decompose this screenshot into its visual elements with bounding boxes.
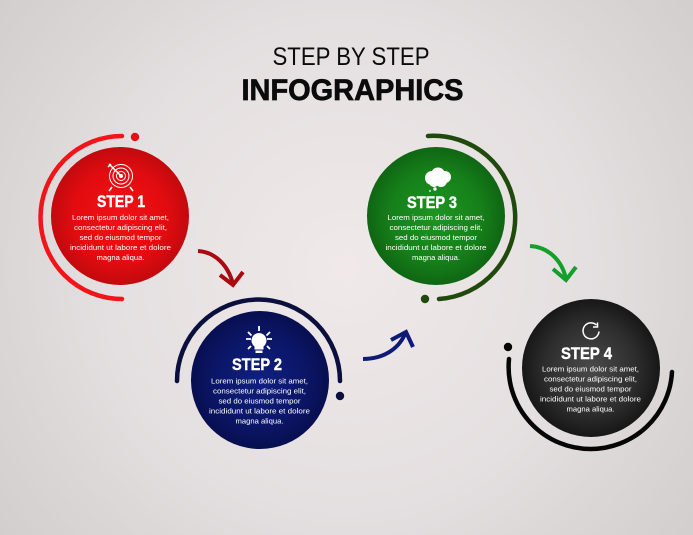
step 4 heading: STEP 4: [561, 345, 613, 363]
step 1 circle: [51, 147, 189, 285]
step 2 text: incididunt ut labore et dolore: [209, 406, 310, 416]
step 1 arc: [40, 136, 122, 299]
step 2 dot: [336, 392, 344, 400]
arrow: red: [198, 251, 243, 285]
step 3 text: [386, 213, 486, 262]
title: [242, 43, 464, 107]
step 2 text: consectetur adipiscing elit,: [213, 386, 306, 396]
icon: cloud: [425, 168, 451, 192]
step 2 circle: [191, 311, 329, 449]
panel: step 4: [504, 299, 672, 449]
step 4 text: [540, 364, 641, 414]
panel: step 3: [367, 136, 515, 303]
panel: step 1: [40, 133, 189, 299]
step 1 text: magna aliqua.: [96, 253, 144, 262]
step 4 text: consectetur adipiscing elit,: [544, 374, 637, 384]
step 4 text: sed do eiusmod tempor: [550, 384, 632, 394]
step 3 heading: STEP 3: [407, 194, 457, 212]
arrow: green: [530, 246, 576, 280]
step 1 heading: STEP 1: [97, 193, 145, 211]
step 3 dot: [421, 295, 429, 303]
step 3 text: consectetur adipiscing elit,: [390, 223, 482, 232]
icon: target: [108, 164, 133, 191]
step 3 text: Lorem ipsum dolor sit amet,: [388, 213, 484, 222]
title: INFOGRAPHICS: [242, 74, 464, 107]
step 1 dot: [131, 133, 139, 141]
step 3 text: sed do eiusmod tempor: [395, 233, 477, 242]
step 3 arc: [428, 136, 515, 299]
step 4 dot: [504, 343, 512, 351]
title: STEP BY STEP: [272, 43, 430, 71]
step 4 arc: [509, 359, 672, 449]
step 1 text: Lorem ipsum dolor sit amet,: [72, 213, 169, 222]
step 2 text: sed do eiusmod tempor: [218, 396, 301, 406]
step 1 text: incididunt ut labore et dolore: [70, 243, 171, 252]
step 4 text: incididunt ut labore et dolore: [540, 394, 641, 404]
step 1 text: consectetur adipiscing elit,: [74, 223, 167, 232]
step 2 text: Lorem ipsum dolor sit amet,: [211, 376, 308, 386]
icon: refresh: [583, 322, 599, 339]
step 3 text: magna aliqua.: [412, 253, 460, 262]
step 4 text: magna aliqua.: [566, 404, 614, 414]
step 2 text: [209, 376, 310, 426]
panel: step 2: [177, 300, 344, 449]
step 2 arc: [177, 300, 340, 381]
step 3 circle: [367, 147, 505, 285]
step 1 text: [70, 213, 171, 262]
step 4 text: Lorem ipsum dolor sit amet,: [542, 364, 639, 374]
step 2 text: magna aliqua.: [236, 416, 284, 426]
step 2 heading: STEP 2: [232, 356, 282, 374]
arrow: blue: [363, 332, 413, 359]
icon: light bulb: [246, 326, 272, 353]
step 3 text: incididunt ut labore et dolore: [386, 243, 486, 252]
step 1 text: sed do eiusmod tempor: [80, 233, 162, 242]
step 4 circle: [522, 299, 660, 437]
